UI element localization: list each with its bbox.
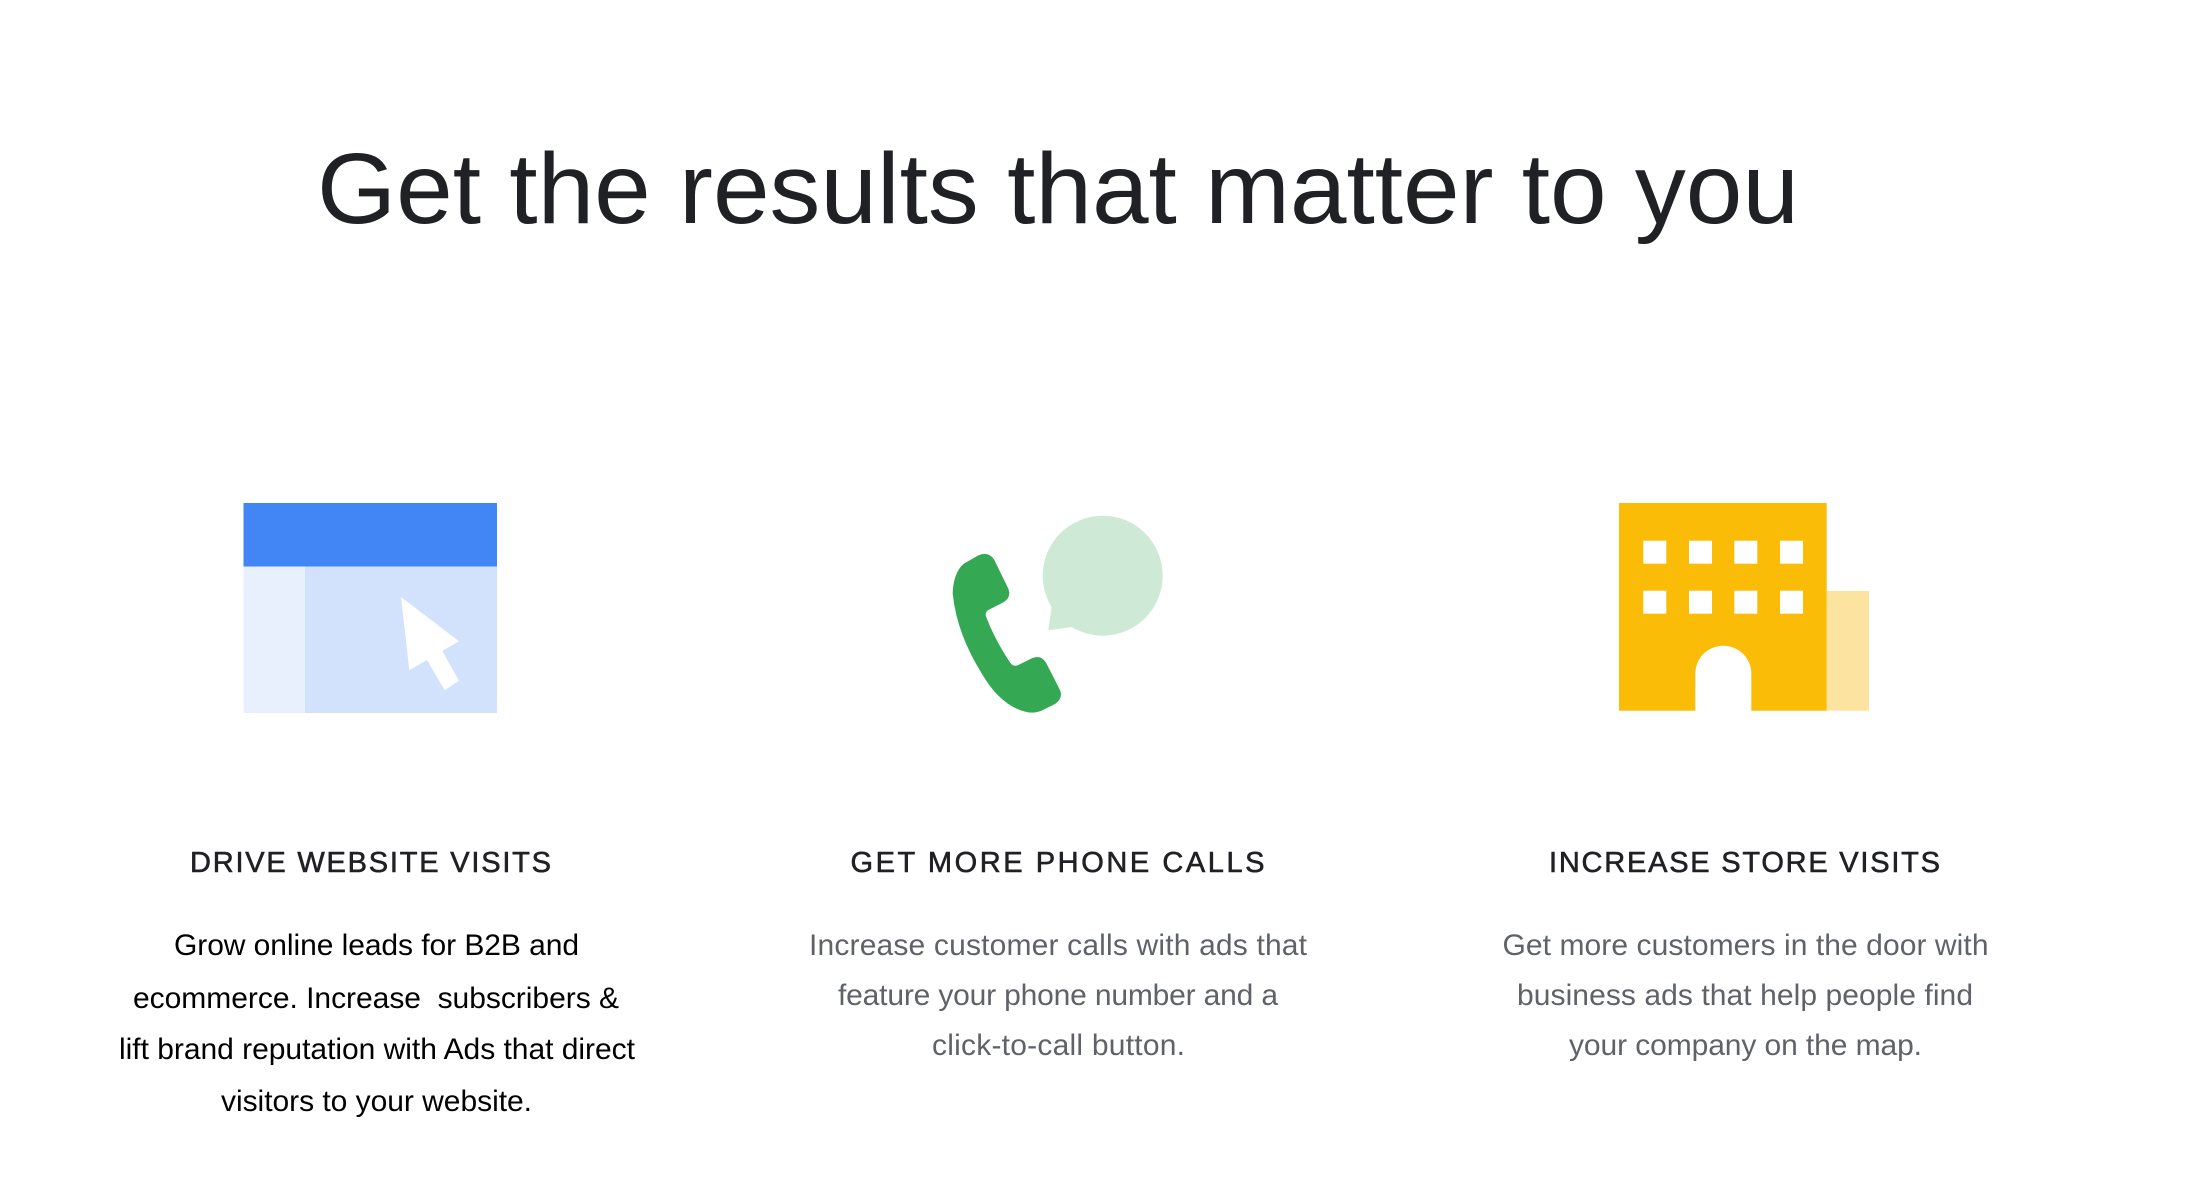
text block: drive website visits description — [119, 929, 636, 1118]
text block: store visits description: business ads that help people find — [1517, 979, 1973, 1012]
heading: increase store visits: INCREASE STORE VISITS — [1549, 847, 1940, 879]
panel: get more phone calls — [809, 516, 1308, 1062]
text block: store visits description: Get more customers in the door with — [1502, 929, 1988, 962]
title: Get the results that matter to you — [317, 133, 1799, 245]
text block: store visits description — [1502, 929, 1988, 1062]
text block: drive website visits description: visitors to your website. — [221, 1085, 532, 1118]
text block: drive website visits description: lift brand reputation with Ads that direct — [119, 1033, 636, 1066]
heading: get more phone calls: GET MORE PHONE CALLS — [850, 847, 1264, 879]
icon: building — [1619, 503, 1869, 711]
text block: drive website visits description: ecommerce. Increase subscribers & — [133, 982, 619, 1015]
text block: phone calls description: feature your phone number and a — [838, 979, 1278, 1012]
icon: browser window with cursor — [244, 503, 497, 713]
panel: drive website visits — [119, 503, 636, 1118]
text block: drive website visits description: Grow online leads for B2B and — [174, 929, 579, 962]
text block: store visits description: your company on the map. — [1569, 1029, 1922, 1062]
panel: increase store visits — [1502, 503, 1988, 1062]
heading: drive website visits: DRIVE WEBSITE VISITS — [190, 847, 551, 879]
text block: phone calls description: Increase customer calls with ads that — [809, 929, 1308, 962]
icon: speech bubble — [1043, 516, 1163, 636]
icon: phone with speech bubble — [953, 516, 1163, 713]
text block: phone calls description — [809, 929, 1308, 1062]
icon: phone handset — [953, 554, 1061, 713]
text block: phone calls description: click-to-call button. — [932, 1029, 1185, 1062]
